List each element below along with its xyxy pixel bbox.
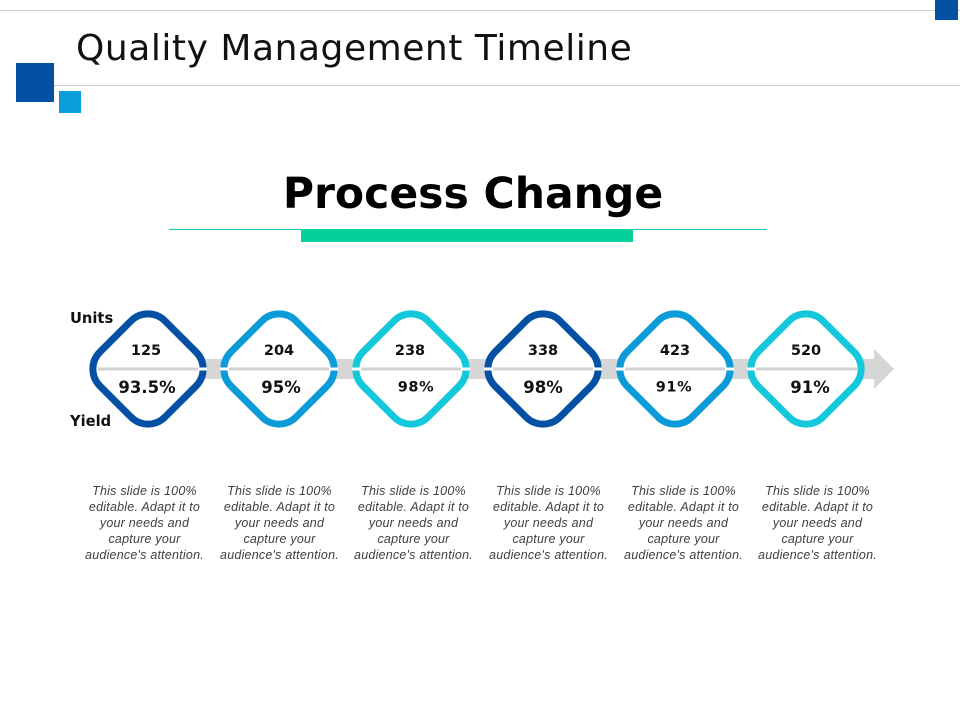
caption 6: capture your [781,532,854,546]
icon: small blue square [59,91,81,113]
caption 1: audience's attention. [85,548,204,562]
milestone 6 [741,304,871,434]
caption 5: This slide is 100% [631,484,736,498]
caption 5: editable. Adapt it to [628,500,739,514]
heading: process change: Process Change [283,170,663,219]
caption 4: This slide is 100% [496,484,601,498]
caption 3: your needs and [369,516,458,530]
milestone 4 [478,304,608,434]
caption 6: editable. Adapt it to [762,500,873,514]
milestone 6: 520 [791,343,821,359]
milestone 2: 95% [261,378,301,397]
caption 3: This slide is 100% [361,484,466,498]
caption 2: capture your [243,532,316,546]
caption 6: your needs and [773,516,862,530]
caption 6 [758,484,877,562]
milestone 3: 98% [398,380,434,396]
milestone 5 [610,304,740,434]
milestone 2 [214,304,344,434]
caption 4 [489,484,608,562]
caption 2: This slide is 100% [227,484,332,498]
milestone 6: 91% [790,378,830,397]
caption 4: audience's attention. [489,548,608,562]
milestone 3 [346,304,476,434]
title: Quality Management Timeline [76,28,632,69]
caption 3: audience's attention. [354,548,473,562]
timeline arrow [200,349,894,389]
caption 2: audience's attention. [220,548,339,562]
heading underline [169,229,767,242]
icon: corner square [935,0,958,20]
milestone 2: 204 [264,343,294,359]
caption 1: editable. Adapt it to [89,500,200,514]
caption 1 [85,484,204,562]
milestone 4: 338 [528,343,558,359]
milestone 4: 98% [523,378,563,397]
caption 1: This slide is 100% [92,484,197,498]
icon: large blue square [16,63,54,102]
caption 1: your needs and [100,516,189,530]
caption 4: capture your [512,532,585,546]
caption 2: your needs and [235,516,324,530]
label: units: Units [70,310,113,327]
caption 3: editable. Adapt it to [358,500,469,514]
header rule [54,85,960,86]
caption 3 [354,484,473,562]
milestone 5: 423 [660,343,690,359]
caption 2: editable. Adapt it to [224,500,335,514]
milestone 1: 93.5% [118,378,176,397]
top rule [0,10,960,11]
caption 5: capture your [647,532,720,546]
caption 2 [220,484,339,562]
caption 3: capture your [377,532,450,546]
milestone 1 [83,304,213,434]
milestone 5: 91% [656,380,692,396]
milestone 1: 125 [131,343,161,359]
label: yield: Yield [69,413,111,430]
caption 4: your needs and [504,516,593,530]
milestone 3: 238 [395,343,425,359]
caption 5 [624,484,743,562]
caption 1: capture your [108,532,181,546]
caption 4: editable. Adapt it to [493,500,604,514]
caption 6: This slide is 100% [765,484,870,498]
caption 5: audience's attention. [624,548,743,562]
caption 5: your needs and [639,516,728,530]
caption 6: audience's attention. [758,548,877,562]
